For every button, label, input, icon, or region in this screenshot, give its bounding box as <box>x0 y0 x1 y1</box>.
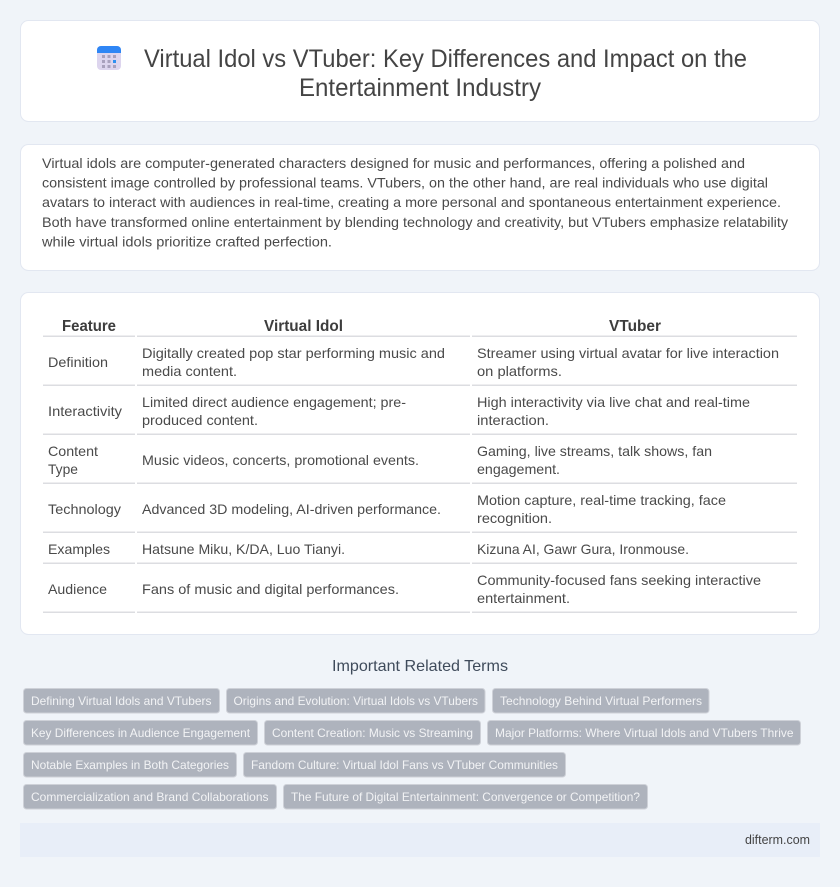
tag: technology: Technology Behind Virtual Performers <box>500 694 702 708</box>
table row: interactivity <box>43 394 797 435</box>
text block: introduction paragraph: while virtual idols prioritize crafted perfection. <box>41 233 332 249</box>
table row: audience: Audience <box>48 581 107 597</box>
table row: examples <box>43 541 797 564</box>
tag: major platforms: Major Platforms: Where Virtual Idols and VTubers Thrive <box>495 726 794 740</box>
table header row: Feature <box>62 318 116 335</box>
table row: technology: Motion capture, real-time tracking, face <box>477 492 726 508</box>
heading: important related terms: Important Related Terms <box>332 658 508 675</box>
text block: introduction paragraph <box>41 155 788 249</box>
table row: audience: Fans of music and digital performances. <box>142 581 399 597</box>
panel: related term tags <box>24 688 800 809</box>
table row: content type: Content <box>48 443 98 459</box>
tag: content creation <box>264 720 480 745</box>
footer <box>20 823 820 857</box>
table row: definition: Definition <box>48 354 108 370</box>
tag: technology <box>492 688 709 713</box>
table row: audience <box>43 572 797 613</box>
tag: fandom culture <box>244 752 566 777</box>
table row: content type: Gaming, live streams, talk shows, fan <box>477 443 712 459</box>
table row: interactivity: produced content. <box>142 412 258 428</box>
tag: major platforms <box>488 720 800 745</box>
tag: future: The Future of Digital Entertainment: Convergence or Competition? <box>291 790 640 804</box>
table row: examples: Examples <box>48 541 110 557</box>
table header row: VTuber <box>609 318 661 335</box>
tag: commercialization <box>24 784 276 809</box>
tag: content creation: Content Creation: Music vs Streaming <box>272 726 473 740</box>
table row: audience: Community-focused fans seeking interactive <box>477 572 761 588</box>
tag: audience engagement: Key Differences in Audience Engagement <box>31 726 251 740</box>
table row: content type: engagement. <box>477 461 560 477</box>
table row: interactivity: Interactivity <box>48 403 122 419</box>
text block: introduction paragraph: Virtual idols are computer-generated characters designed for music and performances, offering a polished and <box>42 155 745 171</box>
tag: audience engagement <box>24 720 258 745</box>
table row: definition <box>43 345 797 386</box>
table row: examples: Hatsune Miku, K/DA, Luo Tianyi. <box>142 541 345 557</box>
table header row: Virtual Idol <box>264 318 343 335</box>
table row: definition: on platforms. <box>477 363 562 379</box>
tag: commercialization: Commercialization and Brand Collaborations <box>31 790 268 804</box>
text block: introduction paragraph: consistent image controlled by professional teams. VTubers, on the other hand, are real individuals who use digital <box>42 175 768 191</box>
table row: interactivity: High interactivity via live chat and real-time <box>477 394 750 410</box>
table row: content type: Music videos, concerts, promotional events. <box>142 452 419 468</box>
text block: introduction paragraph: avatars to interact with audiences in real-time, creating a more personal and spontaneous entertainment experience. <box>42 194 781 210</box>
footer: difterm.com <box>745 832 810 847</box>
title: Entertainment Industry <box>299 74 541 102</box>
table row: examples: Kizuna AI, Gawr Gura, Ironmouse. <box>477 541 689 557</box>
panel: header <box>20 20 820 122</box>
tag: origins: Origins and Evolution: Virtual Idols vs VTubers <box>234 694 478 708</box>
table row: interactivity: Limited direct audience engagement; pre- <box>142 394 406 410</box>
table row: technology: Advanced 3D modeling, AI-driven performance. <box>142 501 441 517</box>
tag: notable examples: Notable Examples in Both Categories <box>31 758 229 772</box>
tag: defining <box>24 688 220 713</box>
table row: technology: Technology <box>48 501 121 517</box>
title: Virtual Idol vs VTuber: Key Differences and Impact on the <box>144 45 747 73</box>
panel: comparison table <box>20 292 820 634</box>
tag: notable examples <box>24 752 236 777</box>
table row: technology: recognition. <box>477 510 552 526</box>
table row: content type <box>43 443 797 484</box>
title <box>144 45 747 102</box>
tag: fandom culture: Fandom Culture: Virtual Idol Fans vs VTuber Communities <box>251 758 558 772</box>
table row: technology <box>43 492 797 533</box>
table header row <box>43 318 797 337</box>
tag: origins <box>226 688 485 713</box>
table row: interactivity: interaction. <box>477 412 549 428</box>
text block: introduction paragraph: Both have transformed online entertainment by blending technology and creativity, but VTubers emphasize relatability <box>42 214 788 230</box>
icon: calendar <box>97 46 121 70</box>
table row: audience: entertainment. <box>477 590 570 606</box>
panel: introduction <box>20 144 820 270</box>
table row: definition: media content. <box>142 363 237 379</box>
table row: definition: Streamer using virtual avatar for live interaction <box>477 345 779 361</box>
table row: definition: Digitally created pop star performing music and <box>142 345 445 361</box>
table row: content type: Type <box>48 461 78 477</box>
tag: defining: Defining Virtual Idols and VTubers <box>31 694 212 708</box>
tag: future <box>284 784 648 809</box>
